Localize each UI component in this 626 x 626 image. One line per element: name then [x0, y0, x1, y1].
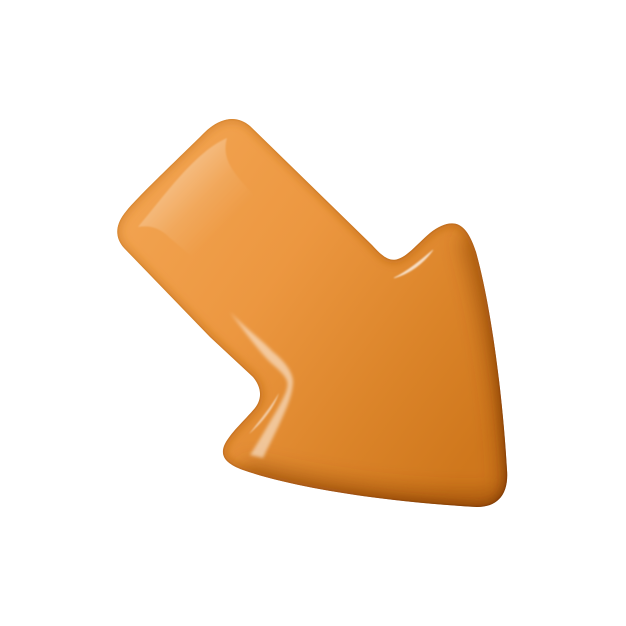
highlight: large gloss on arrow tail — [138, 138, 262, 272]
illustration: glossy orange 3D arrow pointing down-right — [117, 119, 508, 507]
arrow body — [117, 119, 510, 507]
highlight: streak near arrowhead tip — [394, 250, 433, 278]
highlight: streak along inner bend — [230, 312, 293, 458]
highlight: thin streak near notch — [249, 393, 279, 434]
soft bottom and right shading — [243, 235, 510, 503]
dark contour — [117, 119, 507, 507]
rim shadow — [117, 119, 507, 507]
